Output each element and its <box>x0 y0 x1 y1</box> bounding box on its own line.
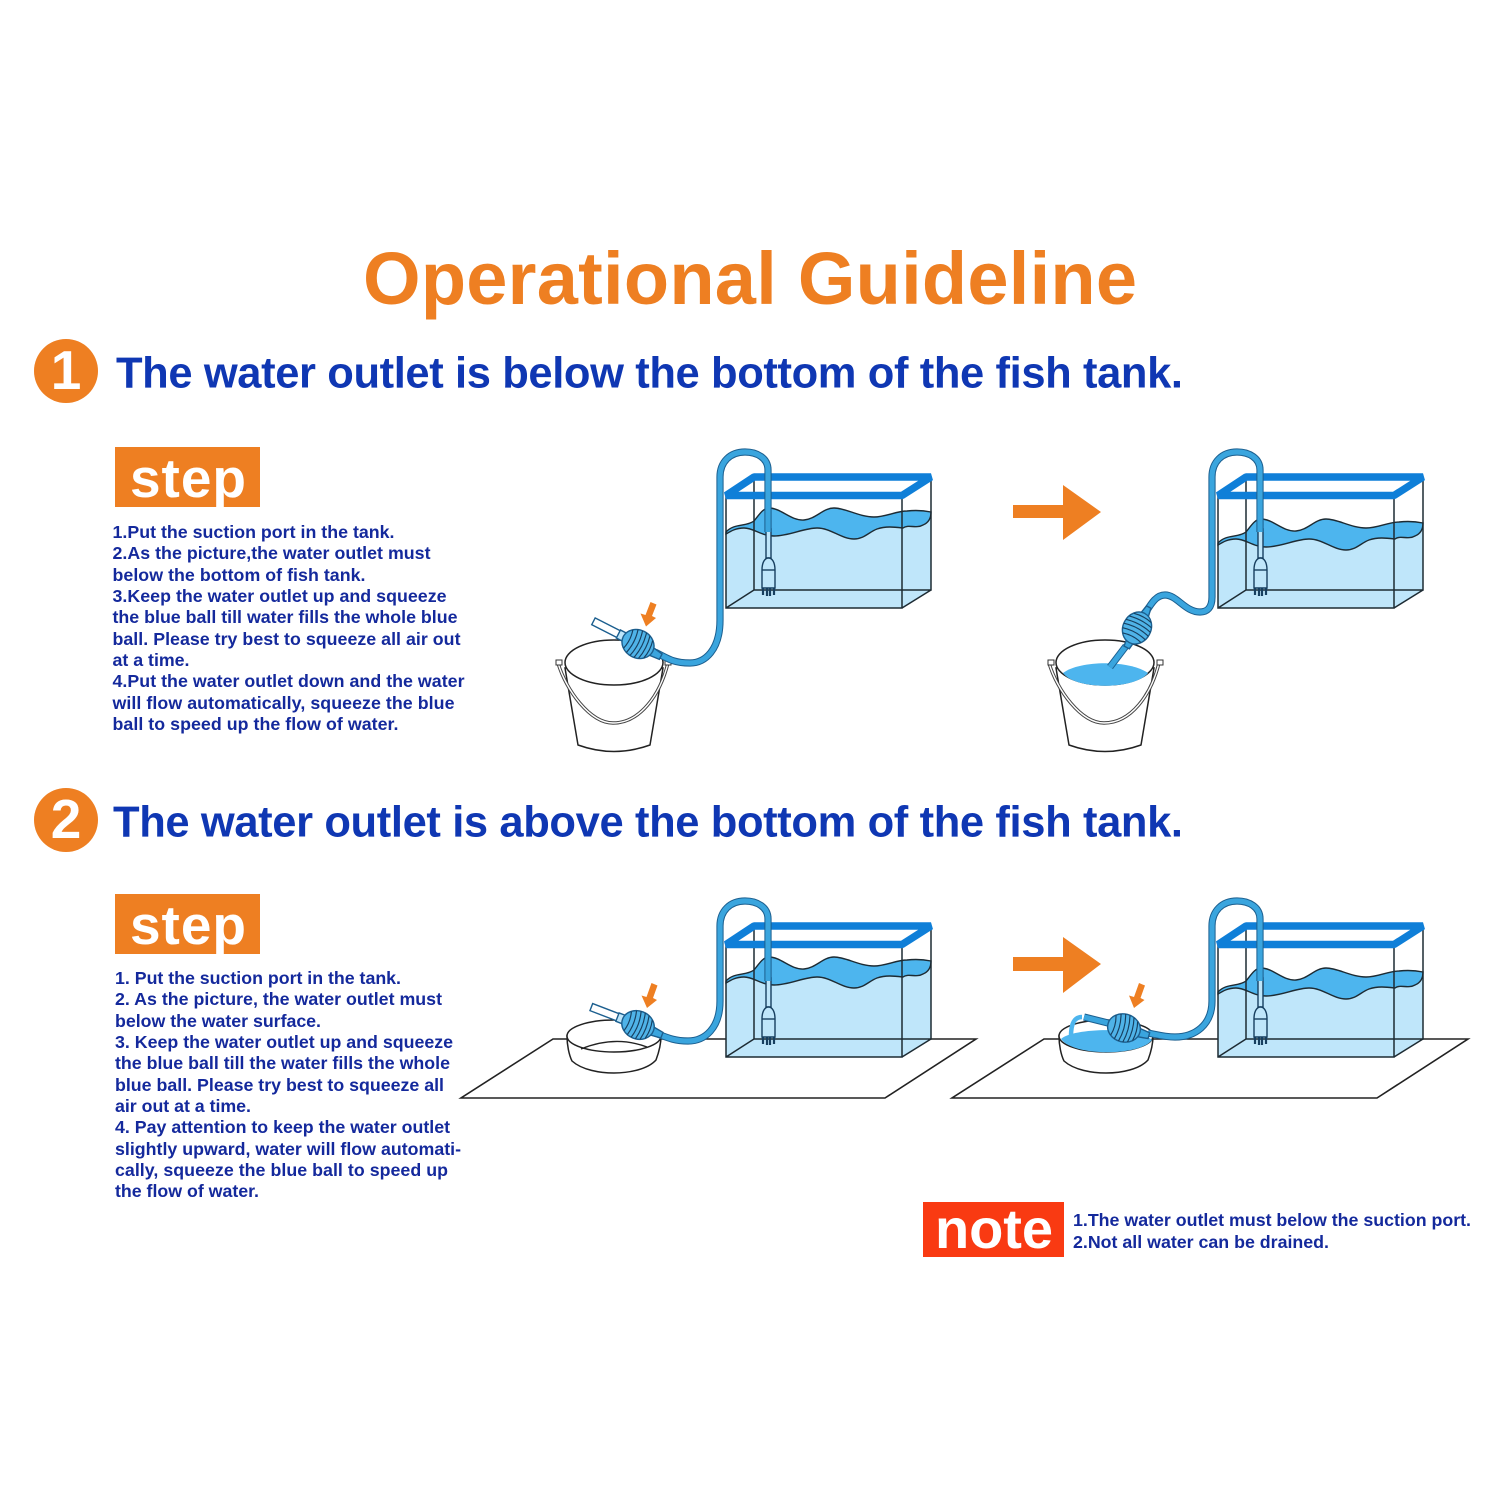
fish tank <box>726 926 931 1057</box>
step instructions 1: at a time. <box>112 650 190 670</box>
step instructions 2: 3. Keep the water outlet up and squeeze <box>115 1032 453 1052</box>
table surface <box>952 1039 1468 1098</box>
step instructions 1: ball to speed up the flow of water. <box>112 714 398 734</box>
step instructions 1: ball. Please try best to squeeze all air out <box>112 629 461 649</box>
step instructions 2: 4. Pay attention to keep the water outlet <box>115 1117 450 1137</box>
small orange arrow <box>642 983 658 1008</box>
bucket with water <box>1048 640 1163 752</box>
step instructions 1: 3.Keep the water outlet up and squeeze <box>112 586 447 606</box>
fish tank <box>1218 926 1423 1057</box>
diagram 2a: tank and bowl on table before flow <box>461 901 976 1098</box>
table surface <box>461 1039 976 1098</box>
siphon hose <box>655 452 768 663</box>
squeeze ball <box>586 994 667 1047</box>
squeeze ball <box>1104 1010 1153 1048</box>
fish tank <box>726 477 931 608</box>
note text: 2.Not all water can be drained. <box>1073 1232 1329 1252</box>
section 1 heading: The water outlet is below the bottom of the fish tank. <box>116 350 1183 398</box>
step instructions 2: slightly upward, water will flow automati- <box>115 1139 461 1159</box>
diagram 2b: tank and bowl on table during flow <box>952 901 1468 1098</box>
note text <box>1073 1210 1471 1252</box>
fish tank <box>1218 477 1423 608</box>
siphon hose <box>1110 452 1260 667</box>
section 2 number badge: 2 <box>51 788 81 850</box>
step instructions 1: below the bottom of fish tank. <box>112 565 366 585</box>
diagram 1a: tank and bucket before flow <box>556 452 931 752</box>
section 2 number badge <box>34 788 98 852</box>
step instructions 2: 2. As the picture, the water outlet must <box>115 989 442 1009</box>
step instructions 1: 1.Put the suction port in the tank. <box>112 522 394 542</box>
bucket <box>556 640 671 752</box>
step label 2: step <box>130 894 246 956</box>
step label 1: step <box>130 447 246 509</box>
step instructions 2: air out at a time. <box>115 1096 251 1116</box>
step instructions 1 <box>112 522 465 734</box>
section 1 number badge: 1 <box>51 339 81 401</box>
large orange arrow 1 <box>1013 485 1101 540</box>
section 2 heading: The water outlet is above the bottom of the fish tank. <box>113 798 1183 846</box>
step instructions 2: the flow of water. <box>115 1181 259 1201</box>
note box: note <box>935 1197 1053 1260</box>
note text: 1.The water outlet must below the suction port. <box>1073 1210 1471 1230</box>
step instructions 1: 4.Put the water outlet down and the water <box>112 671 465 691</box>
step instructions 2 <box>115 968 461 1201</box>
step instructions 1: will flow automatically, squeeze the blue <box>112 693 455 713</box>
step instructions 2: 1. Put the suction port in the tank. <box>115 968 401 988</box>
bowl <box>567 1020 661 1073</box>
small orange arrow <box>640 602 656 626</box>
step instructions 2: below the water surface. <box>115 1011 321 1031</box>
section 1 number badge <box>34 339 98 403</box>
squeeze ball <box>1114 600 1161 654</box>
step instructions 2: cally, squeeze the blue ball to speed up <box>115 1160 448 1180</box>
step instructions 1: 2.As the picture,the water outlet must <box>112 543 431 563</box>
bowl with water <box>1059 1020 1153 1073</box>
step instructions 2: the blue ball till the water fills the whole <box>115 1053 450 1073</box>
step instructions 2: blue ball. Please try best to squeeze all <box>115 1075 444 1095</box>
large orange arrow 2 <box>1013 937 1101 993</box>
squeeze ball <box>587 609 668 668</box>
step instructions 1: the blue ball till water fills the whole blue <box>112 607 458 627</box>
title: Operational Guideline <box>363 237 1137 320</box>
diagram 1b: tank and bucket during flow <box>1048 452 1423 752</box>
siphon hose <box>655 901 768 1041</box>
small orange arrow <box>1129 983 1145 1008</box>
siphon hose <box>1071 901 1260 1037</box>
